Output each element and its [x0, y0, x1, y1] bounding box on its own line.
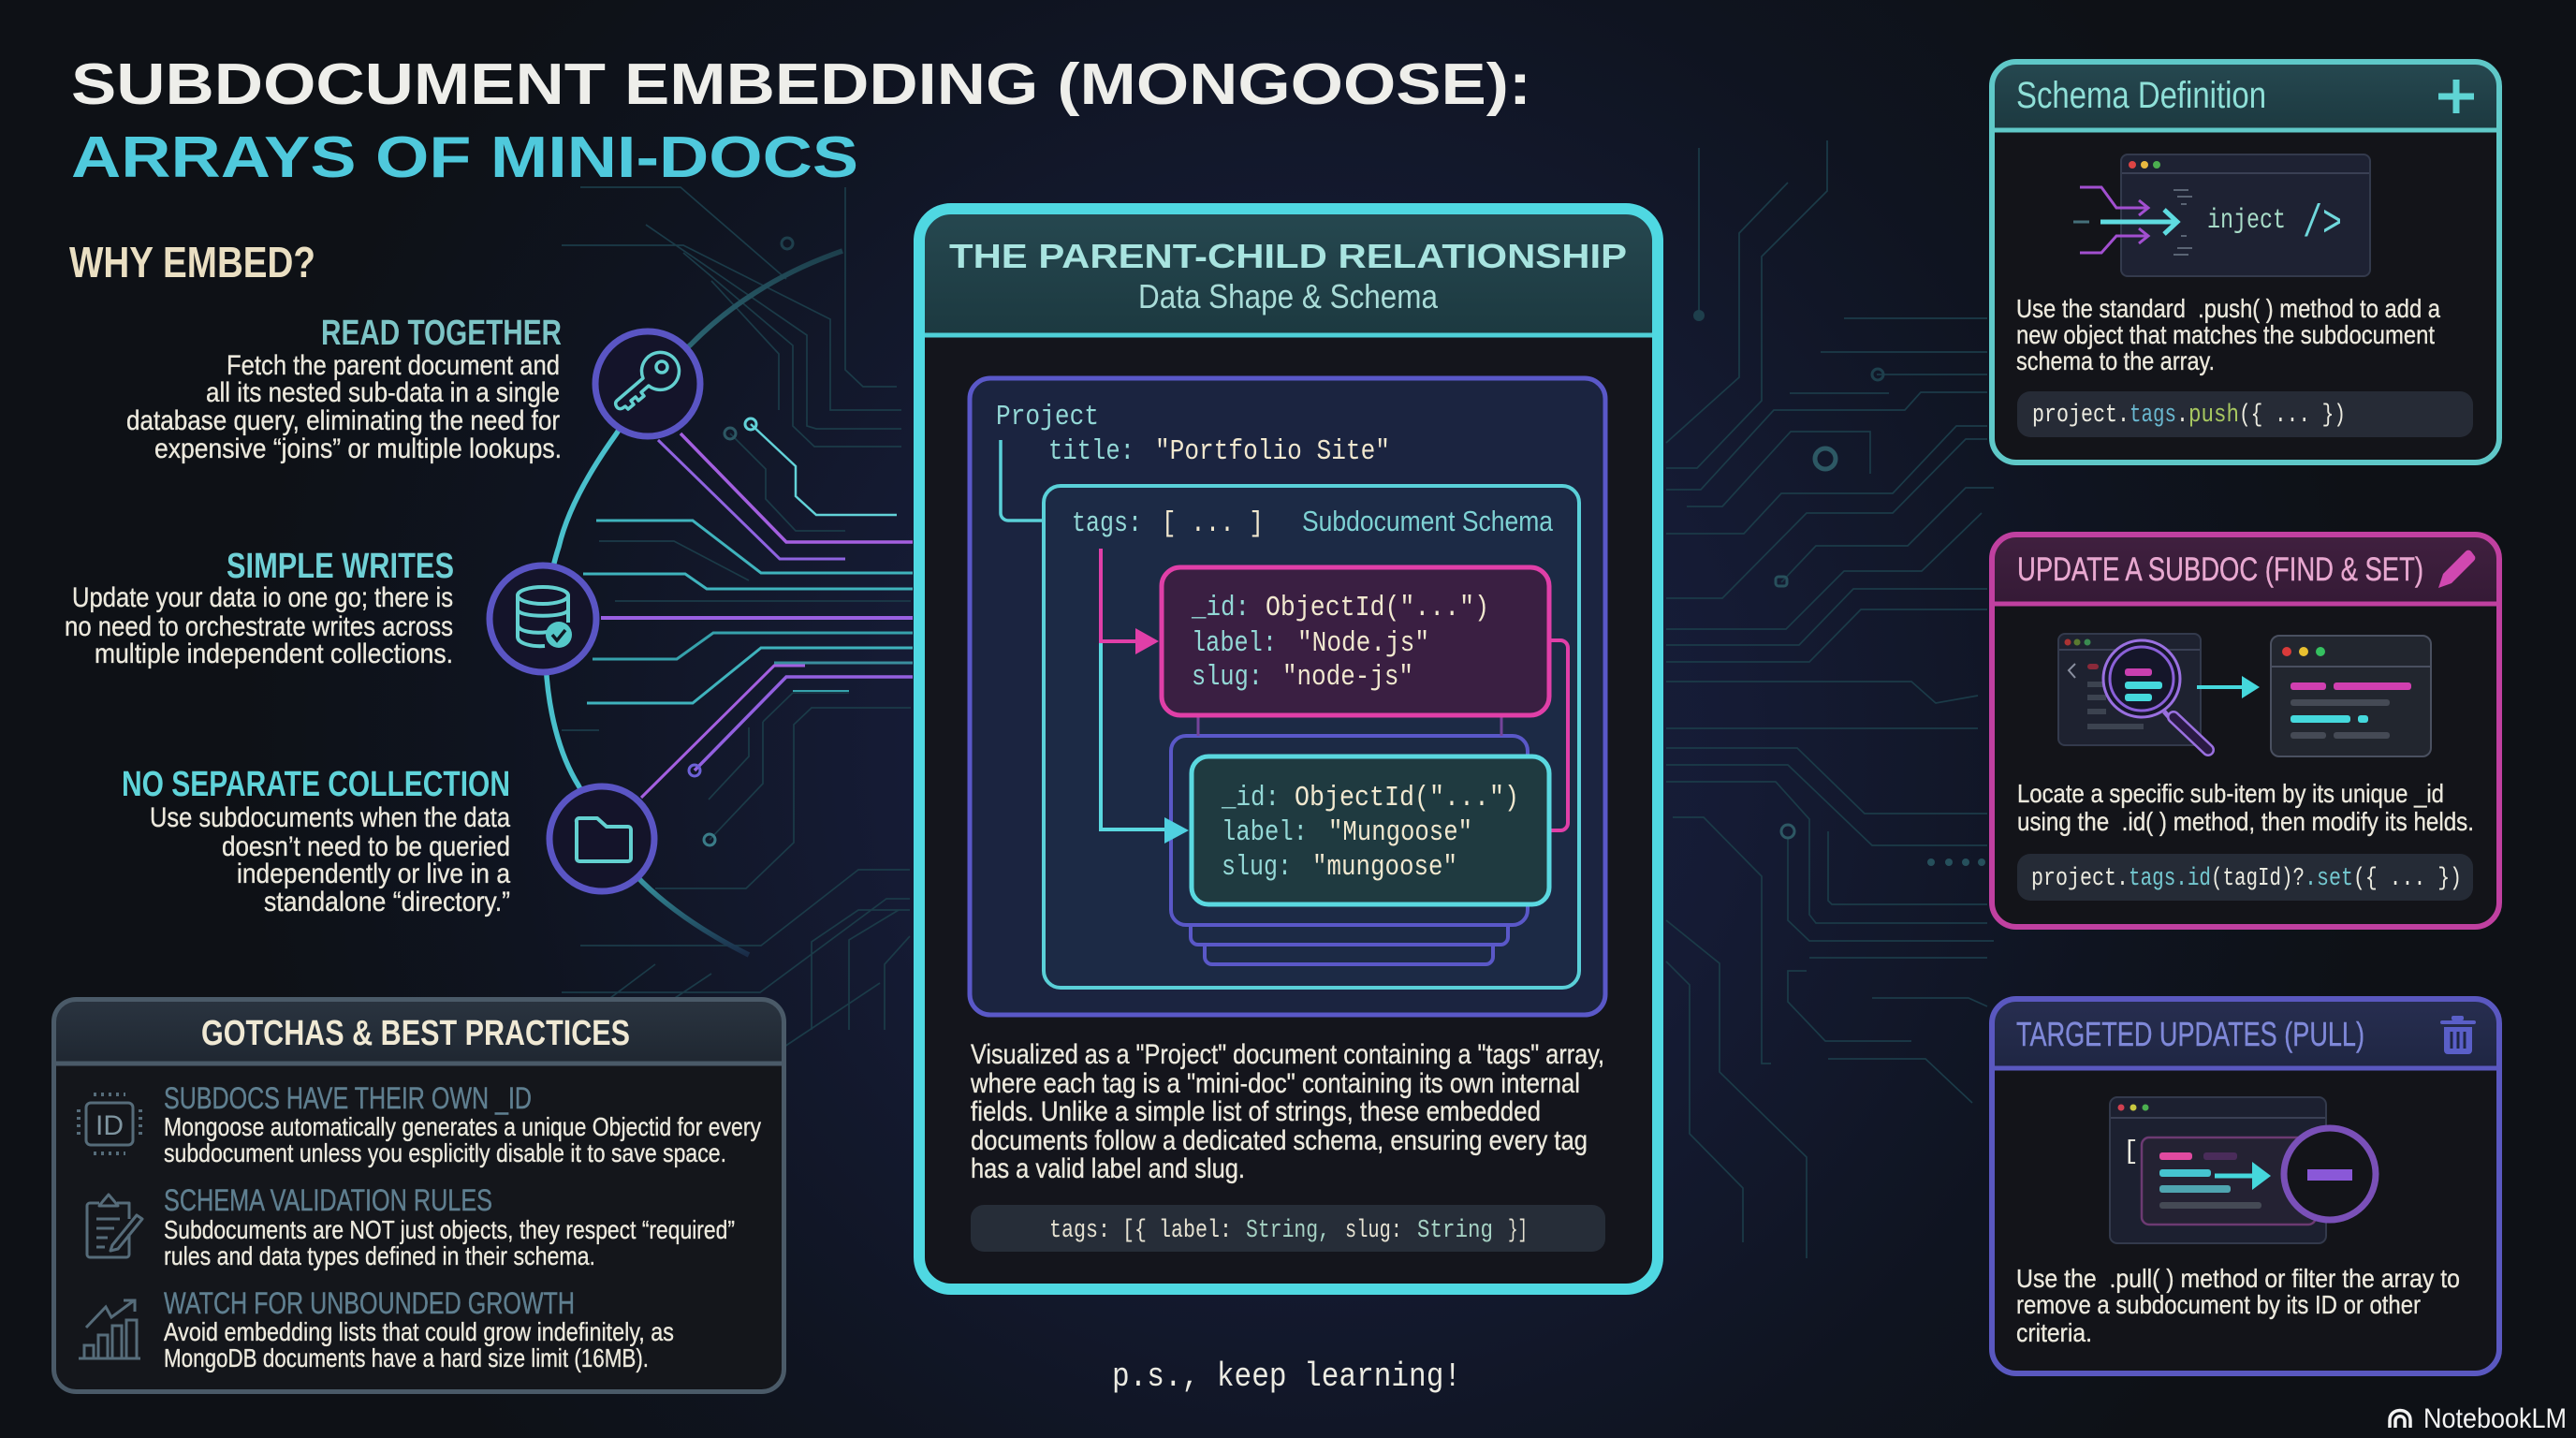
- benefit: no separate collection: NO SEPARATE COLLECTION: [122, 765, 510, 804]
- code bar: push: tags: [2130, 402, 2176, 430]
- heading: why embed: WHY EMBED?: [69, 238, 315, 286]
- icon: clipboard: [87, 1195, 142, 1257]
- benefit: simple writes: [65, 547, 454, 669]
- heading: gotchas: GOTCHAS & BEST PRACTICES: [201, 1014, 630, 1053]
- icon: key: [595, 331, 700, 436]
- icon: id chip: ID: [95, 1110, 124, 1141]
- gotcha: watch for unbounded growth: MongoDB documents have a hard size limit (16MB).: [164, 1343, 649, 1372]
- gotcha: watch for unbounded growth: [164, 1286, 674, 1372]
- code bar: push: push: [2188, 402, 2239, 430]
- illustration: inject window: />: [2303, 199, 2342, 250]
- code bar: tags schema: slug:: [1345, 1217, 1402, 1245]
- benefit: read together: [126, 314, 562, 464]
- code bar: find and set: ({ ... }): [2353, 865, 2462, 893]
- gotcha: subdocs have their own id: Mongoose automatically generates a unique Objectid for every: [164, 1112, 761, 1141]
- subdocument: mungoose: ObjectId("..."): [1295, 782, 1519, 814]
- code bar: tags schema: String: [1417, 1217, 1493, 1245]
- icon: plus: [2438, 80, 2474, 113]
- code bar: tags schema: [971, 1205, 1605, 1252]
- card description: schema to the array.: [2016, 346, 2215, 375]
- subdocument: node.js: "node-js": [1282, 661, 1413, 694]
- benefit: read together: READ TOGETHER: [321, 314, 562, 353]
- card heading: TARGETED UPDATES (PULL): [2016, 1015, 2364, 1053]
- subdocument: node.js: "Node.js": [1297, 627, 1429, 660]
- card description: [2016, 294, 2440, 375]
- subdocument: node.js: _id:: [1191, 592, 1250, 624]
- description text: where each tag is a "mini-doc" containing its own internal: [970, 1068, 1580, 1099]
- code bar: tags schema: }]: [1508, 1217, 1528, 1245]
- panel heading: Data Shape & Schema: [1138, 277, 1439, 315]
- description text: fields. Unlike a simple list of strings, these embedded: [971, 1096, 1541, 1127]
- subdocument: mungoose: [1192, 756, 1549, 904]
- icon: database: [490, 565, 596, 672]
- code bar: find and set: (tagId)?: [2211, 865, 2305, 893]
- project fields: "Portfolio Site": [1155, 435, 1390, 468]
- benefit: no separate collection: [122, 765, 510, 917]
- connecting arc: [545, 251, 842, 955]
- project fields: [996, 401, 1390, 468]
- subdocument: node.js: label:: [1192, 627, 1277, 660]
- subdocument: mungoose: "mungoose": [1312, 851, 1457, 884]
- panel: gotchas and best practices: [54, 1000, 784, 1391]
- benefit: no separate collection: independently or live in a: [237, 858, 510, 889]
- card heading: UPDATE A SUBDOC (FIND & SET): [2017, 551, 2423, 588]
- subdocument: mungoose: label:: [1222, 816, 1308, 849]
- gotcha: subdocs have their own id: SUBDOCS HAVE THEIR OWN _ID: [164, 1081, 532, 1115]
- card description: Locate a specific sub-item by its unique _id: [2017, 779, 2444, 808]
- tags array box: [ ... ]: [1162, 507, 1264, 540]
- gotcha: schema validation rules: rules and data types defined in their schema.: [164, 1241, 595, 1270]
- benefit: no separate collection: doesn’t need to be queried: [222, 831, 510, 862]
- benefit: simple writes: Update your data io one go; there is: [72, 582, 453, 613]
- code bar: find and set: tags.id: [2129, 865, 2211, 893]
- tags array box: tags:: [1072, 507, 1142, 540]
- card: update a subdoc: [1992, 535, 2499, 927]
- project document box: [970, 378, 1605, 1015]
- code bar: find and set: project.: [2031, 865, 2129, 893]
- code bar: tags schema: tags: [{ label:: [1049, 1217, 1232, 1245]
- gotcha: watch for unbounded growth: Avoid embedding lists that could grow indefinitely, as: [164, 1317, 674, 1346]
- card description: new object that matches the subdocument: [2016, 320, 2435, 349]
- card description: [2017, 779, 2474, 836]
- project fields: title:: [1048, 435, 1134, 468]
- card description: [2016, 1264, 2460, 1347]
- benefit: no separate collection: Use subdocuments when the data: [150, 802, 510, 833]
- project fields: Project: [996, 401, 1099, 433]
- code bar: push: ({ ... }): [2239, 402, 2346, 430]
- code bar: push: project.: [2032, 402, 2130, 430]
- stacked documents: [1171, 715, 1528, 964]
- card: schema definition: [1992, 62, 2499, 462]
- code bar: tags schema: String,: [1246, 1217, 1330, 1245]
- subdocument: node.js: ObjectId("..."): [1266, 592, 1489, 624]
- title: ARRAYS OF MINI-DOCS: [71, 125, 858, 190]
- tree arrows: [1101, 549, 1189, 844]
- card description: remove a subdocument by its ID or other: [2016, 1290, 2421, 1319]
- gotcha: schema validation rules: SCHEMA VALIDATION RULES: [164, 1183, 492, 1217]
- panel heading: THE PARENT-CHILD RELATIONSHIP: [949, 237, 1627, 275]
- tags array box: Subdocument Schema: [1302, 505, 1554, 537]
- footer note: p.s., keep learning!: [1112, 1357, 1461, 1396]
- benefit: read together: database query, eliminating the need for: [126, 405, 560, 436]
- icon: folder: [549, 786, 654, 891]
- card description: Use the standard .push( ) method to add a: [2016, 294, 2440, 323]
- illustration: inject window: [2073, 154, 2370, 276]
- card description: criteria.: [2016, 1318, 2092, 1347]
- tags array box: [1044, 486, 1579, 988]
- gotcha: subdocs have their own id: [164, 1081, 761, 1167]
- code bar: push: .: [2176, 402, 2188, 430]
- benefit: read together: all its nested sub-data in a single: [206, 377, 560, 408]
- subdocument: mungoose: _id:: [1221, 782, 1280, 814]
- subdocument: node.js: slug:: [1192, 661, 1263, 694]
- gotcha: schema validation rules: [164, 1183, 735, 1270]
- card heading: Schema Definition: [2016, 75, 2266, 116]
- title: SUBDOCUMENT EMBEDDING (MONGOOSE):: [71, 52, 1531, 117]
- benefit: simple writes: no need to orchestrate writes across: [65, 611, 453, 642]
- benefit: simple writes: SIMPLE WRITES: [227, 547, 454, 586]
- illustration: inject window: inject: [2207, 205, 2286, 237]
- description text: Visualized as a "Project" document containing a "tags" array,: [971, 1039, 1604, 1070]
- panel heading: [949, 237, 1627, 315]
- subdocument: mungoose: slug:: [1222, 851, 1292, 884]
- title: [71, 52, 1531, 190]
- gotcha: watch for unbounded growth: WATCH FOR UNBOUNDED GROWTH: [164, 1286, 575, 1320]
- icon: id chip: [79, 1094, 140, 1153]
- benefit: read together: expensive “joins” or multiple lookups.: [154, 433, 562, 464]
- subdocument: node.js: [1162, 567, 1549, 715]
- description text: has a valid label and slug.: [971, 1153, 1245, 1184]
- icon: growth chart: [79, 1300, 140, 1358]
- code bar: push: [2017, 391, 2473, 437]
- description text: [970, 1039, 1604, 1184]
- code bar: find and set: [2017, 854, 2473, 901]
- connector lines from benefit icons to the central panel: [583, 418, 913, 798]
- description text: documents follow a dedicated schema, ensuring every tag: [971, 1125, 1588, 1156]
- card description: using the .id( ) method, then modify its helds.: [2017, 807, 2474, 836]
- icon: pencil: [2438, 550, 2475, 588]
- code bar: find and set: .set: [2305, 865, 2353, 893]
- illustration: pull from array window: [: [2123, 1137, 2139, 1167]
- benefit: read together: Fetch the parent document and: [227, 350, 560, 381]
- gotcha: subdocs have their own id: subdocument unless you esplicitly disable it to save space.: [164, 1138, 726, 1167]
- card: targeted updates: [1992, 999, 2499, 1373]
- card description: Use the .pull( ) method or filter the array to: [2016, 1264, 2460, 1293]
- illustration: pull from array window: [2110, 1097, 2376, 1243]
- panel: parent-child relationship: [919, 209, 1658, 1289]
- icon: trash can: [2440, 1016, 2476, 1054]
- subdocument: mungoose: "Mungoose": [1328, 816, 1472, 849]
- illustration: find and set windows: [2058, 634, 2431, 756]
- benefit: simple writes: multiple independent collections.: [95, 638, 453, 669]
- gotcha: schema validation rules: Subdocuments are NOT just objects, they respect “required”: [164, 1215, 735, 1244]
- benefit: no separate collection: standalone “directory.”: [264, 887, 510, 917]
